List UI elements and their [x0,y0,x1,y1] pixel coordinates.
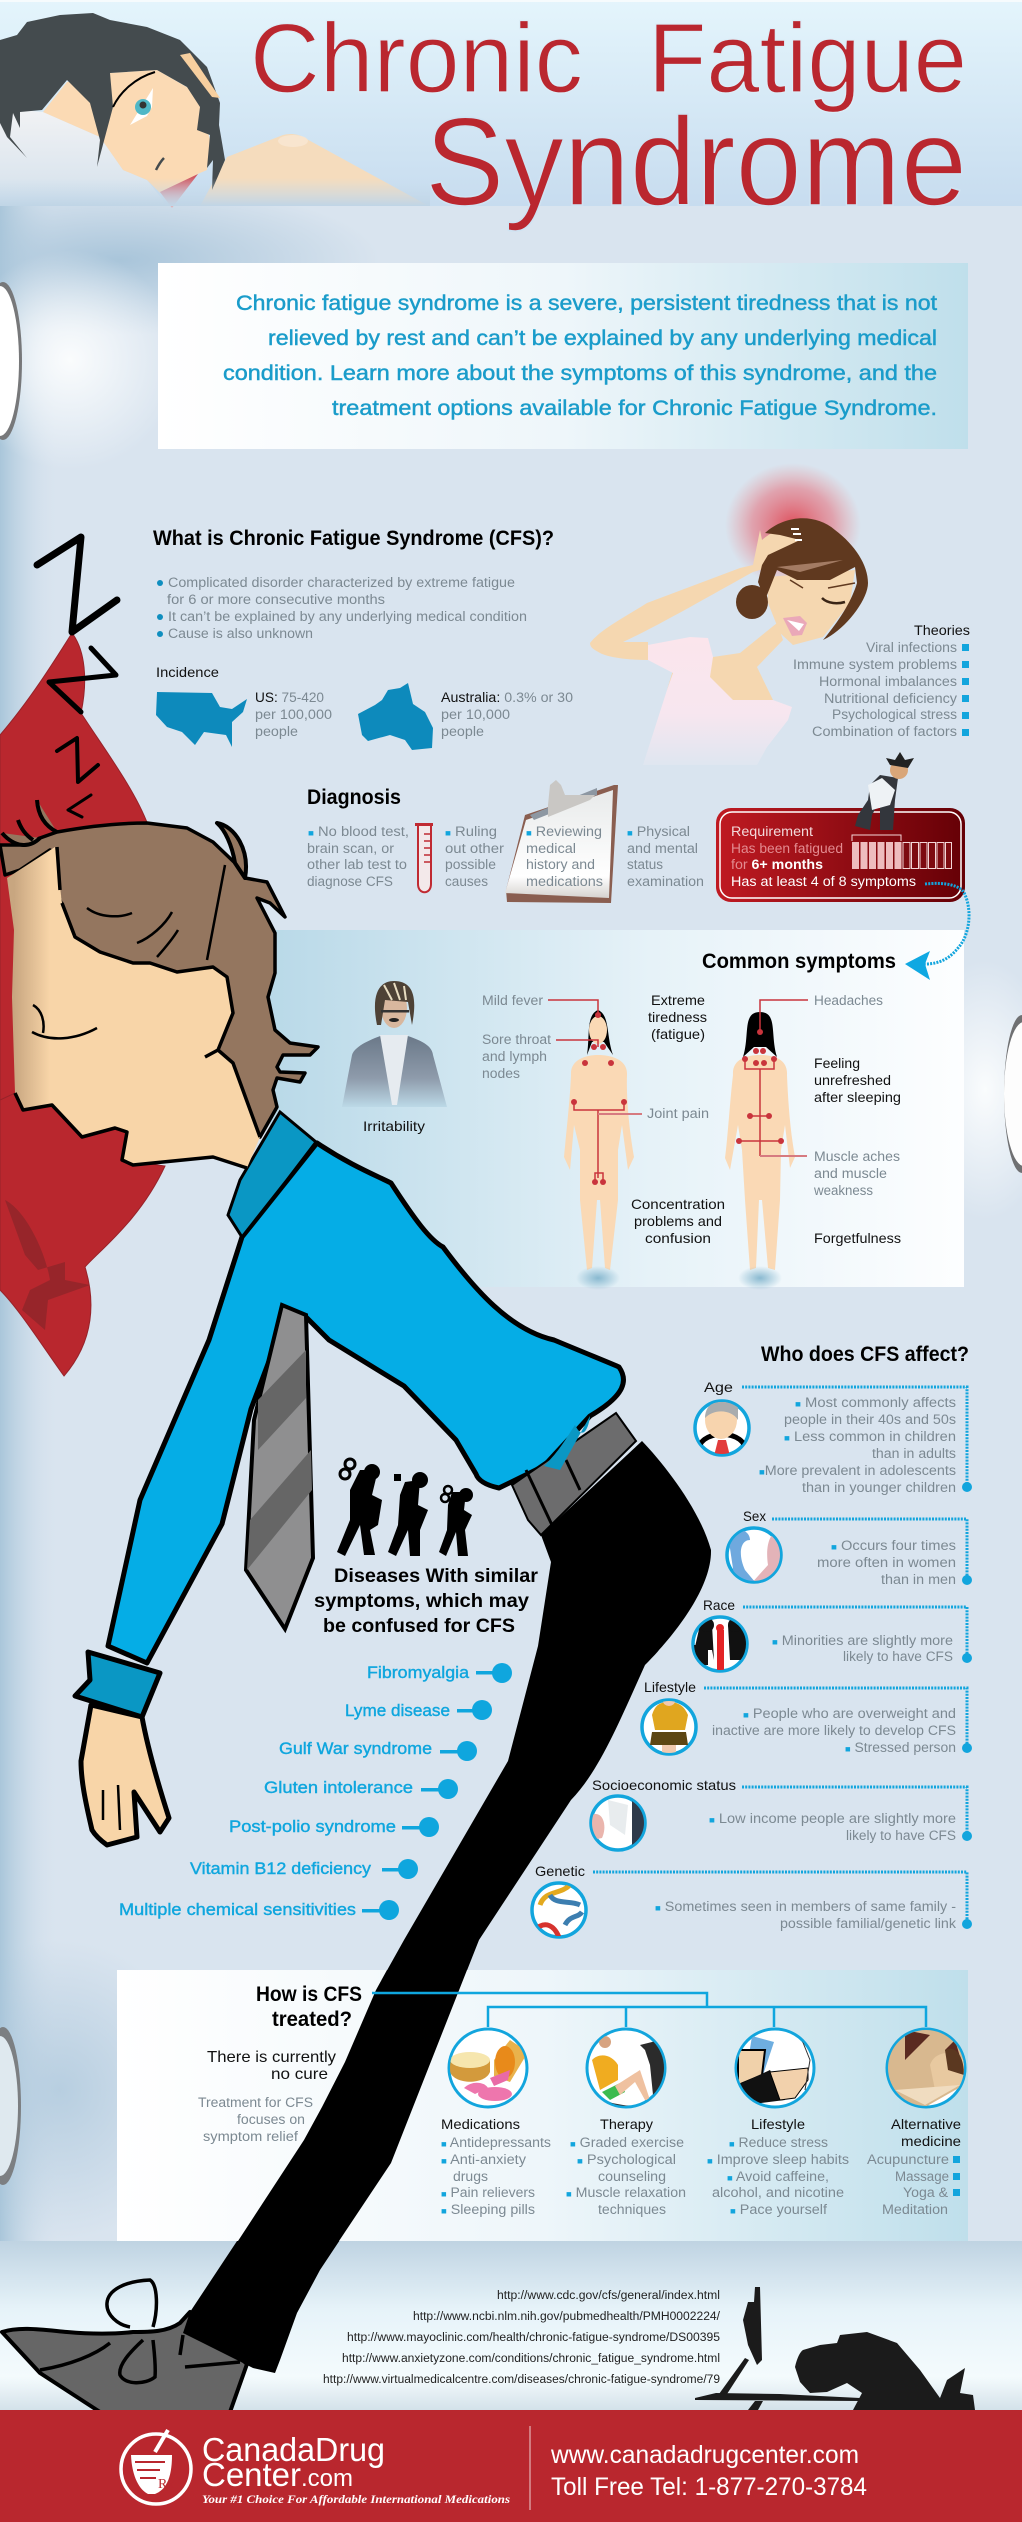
group: genetic: possible familial/genetic link [780,1916,956,1931]
closed eye [32,1005,97,1038]
treatment: alternative medicine: Yoga & [903,2185,948,2200]
group: age: ■ Most commonly affects [795,1395,956,1410]
criterion 4: examination [627,874,704,889]
theories list [793,622,970,739]
symptom labels: and muscle [814,1166,887,1181]
heading: Common symptoms [702,950,896,973]
requirement box: for 6+ months [731,857,823,872]
group: genetic: ■ Sometimes seen in members of same family - [655,1899,956,1914]
Z letters [37,537,117,817]
group: age: than in adults [872,1446,956,1461]
shoelace [40,2280,240,2383]
treatment: alternative medicine: Massage [895,2169,949,2184]
intro panel: condition. Learn more about the symptoms of this syndrome, and the [223,362,937,385]
group: race: likely to have CFS [843,1649,953,1664]
illustration: hood and snoring Z letters [0,537,165,1376]
treatment: therapy [566,2116,686,2217]
criterion 1 [307,824,409,889]
treatment: lifestyle: ■ Avoid caffeine, [727,2169,829,2184]
US stat: per 100,000 [255,707,332,722]
group: sex: ■ Occurs four times [831,1538,956,1553]
tree connector lines [372,1993,926,2027]
group: race: ■ Minorities are slightly more [772,1633,953,1648]
heading: symptoms, which may [314,1591,529,1612]
criterion 2 [445,824,505,889]
criterion 3: medical [526,841,576,856]
disease list [119,1663,512,1920]
group: sex: than in men [881,1572,956,1587]
disease list: Lyme disease [345,1701,450,1720]
group: socioeconomic status: Socioeconomic status [592,1777,736,1793]
symptom labels: Sore throat [482,1032,551,1047]
icon: clipboard [505,780,618,903]
requirement box: Has been fatigued [731,841,843,856]
theories list: Immune system problems [793,657,957,672]
shoe [2,2312,247,2412]
symptom labels: and lymph [482,1049,547,1064]
group: lifestyle: ■ Stressed person [845,1740,956,1755]
hair curls [2,800,246,878]
sources list [323,2290,721,2386]
icon: lifestyle [736,2029,814,2107]
theories list: Theories [914,622,970,638]
no cure note [207,2049,336,2083]
treatment: medications: ■ Antidepressants [441,2135,551,2150]
Australia stat [441,690,573,739]
figure: irritable woman [342,981,447,1107]
theories list: Psychological stress [832,707,957,722]
theories list: Viral infections [866,640,957,655]
icon: Australia map [358,683,433,750]
illustration: person asleep at computer [695,2287,975,2410]
section: who does CFS affect [532,1343,972,1940]
group: socioeconomic status: ■ Low income people are slightly more [709,1811,956,1826]
relief note: Treatment for CFS [198,2095,313,2110]
bullet list: Cause is also unknown [168,626,313,641]
tie [246,1305,313,1629]
treatment: medications [441,2116,551,2217]
belt [512,1413,636,1535]
treatment: therapy: ■ Muscle relaxation [566,2185,686,2200]
treatment: alternative medicine: Alternative [891,2116,961,2132]
group: age: than in younger children [802,1480,956,1495]
treatment: alternative medicine: Meditation [882,2202,948,2217]
treatment: medications: ■ Anti-anxiety [441,2152,526,2167]
title [250,3,967,232]
intro panel: Chronic fatigue syndrome is a severe, persistent tiredness that is not [236,292,937,315]
logo text: Center.com [202,2456,353,2493]
title: Chronic [250,3,583,113]
icon: tired businessmen [337,1459,473,1556]
collar [228,1112,316,1237]
disease list: Fibromyalgia [367,1663,470,1682]
treatment: therapy: ■ Psychological [577,2152,676,2167]
treatment: lifestyle [707,2116,849,2217]
icon: alternative medicine [887,2029,965,2110]
group: age: ■ Less common in children [784,1429,956,1444]
contact details: Toll Free Tel: 1-877-270-3784 [551,2473,867,2501]
intro panel [158,263,968,449]
group: genetic [532,1863,972,1940]
Australia stat: Australia: 0.3% or 30 [441,690,573,705]
treatment: lifestyle: Lifestyle [751,2116,805,2132]
intro panel: treatment options available for Chronic Fatigue Syndrome. [332,397,937,420]
Australia stat: people [441,724,484,739]
heading: Diagnosis [307,786,401,809]
treatment: medications: Medications [441,2116,520,2132]
symptom labels: unrefreshed [814,1072,891,1088]
sources list: http://www.mayoclinic.com/health/chronic-fatigue-syndrome/DS00395 [347,2332,720,2344]
theories list: Combination of factors [812,724,957,739]
heading: be confused for CFS [323,1616,515,1637]
group: lifestyle: ■ People who are overweight and [743,1706,956,1721]
criterion 4 [627,824,704,889]
sources list: http://www.cdc.gov/cfs/general/index.html [497,2290,720,2302]
symptom labels: Mild fever [482,993,544,1008]
cuff [75,1652,160,1717]
criterion 3: medications [526,874,603,889]
section: diseases with similar symptoms [119,1459,539,1920]
icon: US map [156,692,247,747]
section: what is CFS [153,527,573,750]
sources list: http://www.ncbi.nlm.nih.gov/pubmedhealth/PMH0002224/ [413,2311,721,2323]
treatment: therapy: ■ Graded exercise [570,2135,684,2150]
treatment: therapy: counseling [598,2169,666,2184]
disease list: Gluten intolerance [264,1778,413,1797]
symptom labels: Feeling [814,1055,860,1071]
heading: What is Chronic Fatigue Syndrome (CFS)? [153,527,554,550]
no cure note: no cure [271,2066,328,2083]
hair details [87,865,225,960]
title: Syndrome [425,93,967,232]
criterion 2: causes [445,874,488,889]
symptom labels: nodes [482,1066,520,1081]
icon: exhausted man on box [855,752,914,830]
illustration: woman with headache [590,463,868,765]
logo text: CanadaDrug [202,2431,385,2468]
symptom labels: Extreme [651,992,705,1008]
criterion 3: history and [526,857,595,872]
logo text [202,2431,510,2506]
disease list: Vitamin B12 deficiency [190,1859,372,1878]
arrow: requirement to common symptoms [905,883,969,980]
criterion 4: status [627,857,663,872]
face [7,847,260,1168]
group: age [695,1379,972,1495]
theories list: Nutritional deficiency [824,691,957,706]
criterion 1: brain scan, or [307,841,395,856]
icon: medications [449,2029,528,2107]
group: genetic: Genetic [535,1863,585,1879]
illustration: man, pants and shoe [0,800,711,2412]
group: lifestyle: Lifestyle [644,1679,696,1695]
bullet list: Complicated disorder characterized by extreme fatigue [168,575,515,590]
label: Irritability [363,1118,425,1134]
Australia stat: per 10,000 [441,707,510,722]
group: sex [727,1508,972,1587]
section: common symptoms panel [270,930,964,1290]
criterion 1: other lab test to [307,857,407,872]
US stat: US: 75-420 [255,690,324,705]
heading: How is CFS [256,1983,362,2006]
icon: mortar and pestle logo: Rx [158,2477,174,2492]
hand [81,1705,169,1845]
treatment: medications: ■ Sleeping pills [441,2202,535,2217]
face outline [15,847,260,1168]
symptom labels: confusion [645,1230,711,1246]
US stat: people [255,724,298,739]
sources list: http://www.anxietyzone.com/conditions/chronic_fatigue_syndrome.html [342,2353,720,2365]
treatment: alternative medicine [867,2116,961,2217]
group: age: Age [704,1379,733,1395]
treatment: therapy: techniques [598,2202,666,2217]
body figure front [548,1000,642,1290]
heading [314,1566,539,1637]
bullet list [157,575,527,641]
theories list: Hormonal imbalances [819,674,957,689]
sources list: http://www.virtualmedicalcentre.com/diseases/chronic-fatigue-syndrome/79 [323,2374,720,2386]
heading [256,1983,362,2031]
group: sex: more often in women [817,1555,956,1570]
hair [0,823,318,1137]
criterion 3: ■ Reviewing [526,824,602,839]
icon: mortar and pestle logo [121,2430,191,2504]
criterion 1: ■ No blood test, [308,824,409,839]
contact details: www.canadadrugcenter.com [550,2441,859,2469]
symptom labels: problems and [634,1213,722,1229]
requirement box: Requirement [731,824,813,839]
group: socioeconomic status: likely to have CFS [846,1828,956,1843]
criterion 3 [526,824,603,889]
requirement box: Has at least 4 of 8 symptoms [731,874,916,889]
left wall lights [0,282,1022,2185]
logo text: Your #1 Choice For Affordable International Medications [202,2492,510,2506]
criterion 1: diagnose CFS [307,874,393,889]
shirt [108,1143,624,1663]
symptom labels: Concentration [631,1196,725,1212]
title: Fatigue [648,3,967,113]
illustration: sleeping woman at top [0,13,430,208]
disease list: Gulf War syndrome [279,1739,432,1758]
symptom labels: (fatigue) [651,1026,705,1042]
disease list: Multiple chemical sensitivities [119,1900,356,1919]
treatment: therapy: Therapy [600,2116,653,2132]
group: age: people in their 40s and 50s [784,1412,956,1427]
body figure back [725,1000,808,1290]
no cure note: There is currently [207,2049,336,2066]
contact details [550,2441,867,2501]
requirement box [716,808,965,902]
treatment: lifestyle: ■ Improve sleep habits [707,2152,849,2167]
symptom labels: tiredness [648,1009,707,1025]
section: how is CFS treated panel [117,1970,968,2241]
incidence label: Incidence [156,664,219,680]
criterion 2: possible [445,857,496,872]
group: lifestyle [642,1679,972,1757]
treatment: medications: ■ Pain relievers [441,2185,535,2200]
group: socioeconomic status [591,1777,972,1850]
group: age: ■More prevalent in adolescents [759,1463,956,1478]
heading: Diseases With similar [334,1566,539,1587]
symptom labels: Muscle aches [814,1149,900,1164]
symptom labels: Joint pain [647,1106,709,1121]
criterion 2: out other [445,841,505,856]
group: sex: Sex [743,1508,766,1524]
treatment: lifestyle: ■ Pace yourself [730,2202,827,2217]
treatment: lifestyle: ■ Reduce stress [729,2135,828,2150]
icon: therapy [586,2028,666,2108]
criterion 4: and mental [627,841,698,856]
intro panel: relieved by rest and can’t be explained by any underlying medical [268,327,937,350]
heading: treated? [272,2008,352,2031]
relief note [198,2095,313,2144]
pants [183,1441,711,2373]
red scarf [0,1093,165,1376]
disease list: Post-polio syndrome [229,1817,396,1836]
group: lifestyle: inactive are more likely to develop CFS [712,1723,956,1738]
symptom labels: Forgetfulness [814,1230,901,1246]
bullet list: It can’t be explained by any underlying medical condition [168,609,527,624]
icon: test tube [415,823,433,892]
heading: Who does CFS affect? [761,1343,969,1366]
group: race [692,1597,972,1671]
symptom labels: Headaches [814,993,883,1008]
section: diagnosis [307,752,965,903]
relief note: focuses on [237,2112,305,2127]
treatment: alternative medicine: Acupuncture [867,2152,949,2167]
treatment: lifestyle: alcohol, and nicotine [712,2185,844,2200]
symptom labels: after sleeping [814,1089,901,1105]
red hood [0,633,148,1100]
criterion 4: ■ Physical [627,824,690,839]
group: race: Race [703,1597,735,1613]
treatment: alternative medicine: medicine [901,2133,961,2149]
treatment: medications: drugs [453,2169,488,2184]
symptom labels: weakness [813,1183,873,1198]
symptom labels [482,992,901,1246]
criterion 2: ■ Ruling [445,824,497,839]
US stat [255,690,332,739]
leg overlap [238,1970,467,2241]
bullet list: for 6 or more consecutive months [167,592,385,607]
footer band [0,2410,1022,2522]
relief note: symptom relief [203,2129,298,2144]
